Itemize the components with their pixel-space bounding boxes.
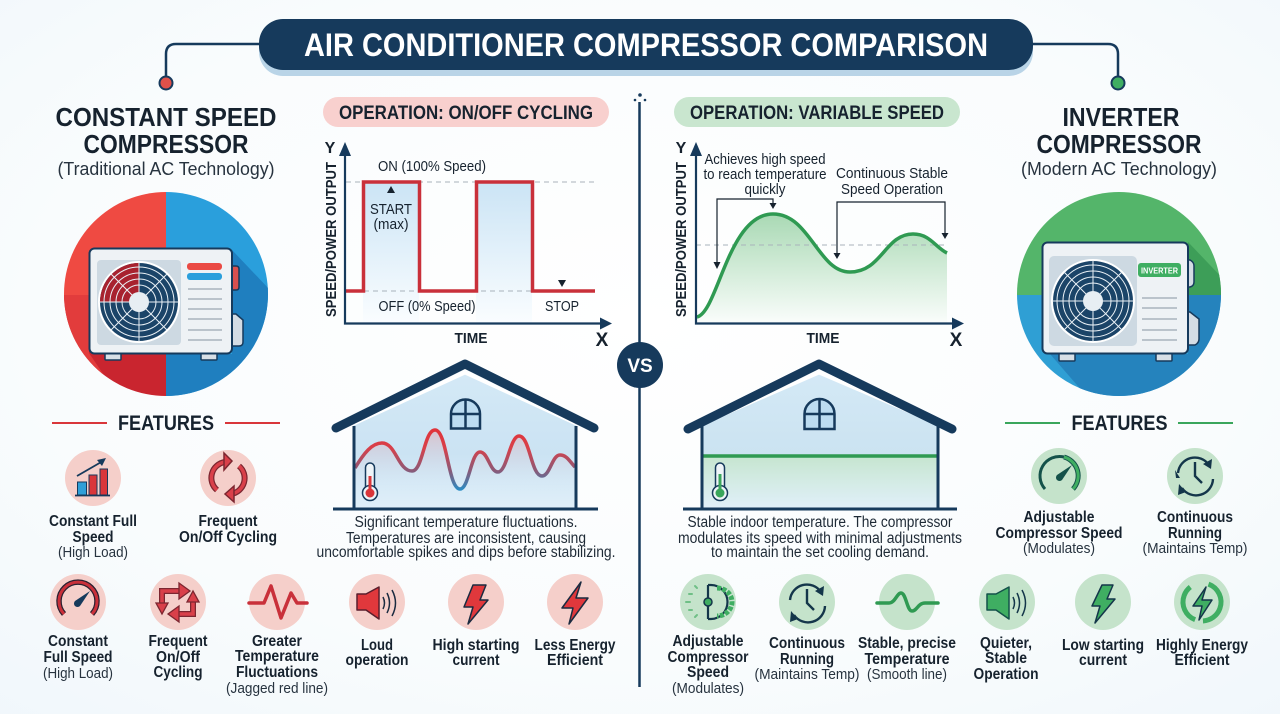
feature: constant full speed (top) bbox=[49, 450, 137, 561]
pill: operation on/off cycling: OPERATION: ON/OFF CYCLING bbox=[339, 103, 593, 124]
left heading: constant speed compressor: (Traditional AC Technology) bbox=[58, 159, 274, 179]
feature: low starting current: current bbox=[1079, 652, 1127, 669]
feature: highly energy efficient: Efficient bbox=[1174, 652, 1230, 669]
pill: operation variable speed bbox=[674, 97, 960, 127]
feature: quieter stable operation: Operation bbox=[974, 666, 1038, 683]
feature: loud operation: operation bbox=[346, 652, 408, 669]
feature: highly energy efficient bbox=[1156, 574, 1248, 669]
right heading: inverter compressor: INVERTER bbox=[1062, 102, 1180, 132]
feature: greater temperature fluctuations: (Jagged red line) bbox=[226, 680, 328, 697]
chart: on/off speed over time: X bbox=[596, 330, 609, 351]
feature: continuous running (top): Running bbox=[1168, 525, 1222, 542]
text: left house description: uncomfortable spikes and dips before stabilizing. bbox=[316, 544, 616, 561]
feature: frequent on/off cycling (top) bbox=[179, 450, 277, 546]
pill: operation variable speed: OPERATION: VARIABLE SPEED bbox=[690, 103, 944, 124]
feature: stable precise temperature: Temperature bbox=[864, 651, 950, 668]
feature: stable precise temperature: Stable, precise bbox=[858, 635, 956, 652]
feature: frequent on/off cycling (bottom) bbox=[148, 574, 208, 681]
pill: operation on/off cycling bbox=[323, 97, 609, 127]
left heading: constant speed compressor: COMPRESSOR bbox=[84, 129, 249, 159]
text: left house description: Temperatures are inconsistent, causing bbox=[346, 530, 586, 547]
feature: low starting current bbox=[1062, 574, 1144, 669]
text: left house description: Significant temperature fluctuations. bbox=[354, 514, 578, 531]
left connector to red node bbox=[160, 44, 259, 90]
chart: on/off speed over time: START bbox=[370, 201, 412, 218]
right heading: inverter compressor bbox=[1021, 102, 1217, 179]
feature: loud operation: Loud bbox=[361, 637, 393, 654]
title banner: AIR CONDITIONER COMPRESSOR COMPARISON bbox=[304, 27, 988, 63]
chart: variable speed over time: Continuous Stable bbox=[836, 165, 948, 182]
feature: continuous running (bottom): Running bbox=[780, 651, 834, 668]
feature: frequent on/off cycling (bottom): Frequent bbox=[148, 633, 208, 650]
VS badge: VS bbox=[627, 356, 653, 377]
title banner bbox=[259, 19, 1033, 76]
feature: high starting current: High starting bbox=[432, 637, 520, 654]
feature: low starting current: Low starting bbox=[1062, 637, 1144, 654]
chart: variable speed over time: TIME bbox=[806, 330, 840, 347]
heading: right features: FEATURES bbox=[1072, 412, 1168, 435]
left heading: constant speed compressor: CONSTANT SPEED bbox=[56, 102, 276, 132]
chart: variable speed over time: SPEED/POWER OUTPUT bbox=[673, 162, 690, 317]
text: right house description: Stable indoor temperature. The compressor bbox=[688, 514, 952, 531]
feature: constant full speed (bottom): Full Speed bbox=[44, 649, 112, 666]
text: left house description bbox=[316, 514, 616, 561]
right connector to green node bbox=[1033, 44, 1124, 90]
feature: frequent on/off cycling (bottom): Cycling bbox=[154, 664, 202, 681]
icon: inverter outdoor unit bbox=[1017, 192, 1230, 400]
feature: constant full speed (top): Constant Full bbox=[49, 513, 137, 530]
feature: quieter stable operation bbox=[974, 574, 1038, 683]
feature: frequent on/off cycling (top): Frequent bbox=[198, 513, 258, 530]
feature: highly energy efficient: Highly Energy bbox=[1156, 637, 1248, 654]
feature: adjustable compressor speed (top): Compressor Speed bbox=[996, 525, 1122, 542]
feature: adjustable compressor speed (bottom): Compressor bbox=[668, 649, 748, 666]
feature: greater temperature fluctuations: Greater bbox=[252, 633, 302, 650]
chart: variable speed over time: Y bbox=[676, 140, 687, 157]
feature: continuous running (top) bbox=[1142, 448, 1248, 557]
feature: greater temperature fluctuations: Fluctuations bbox=[236, 664, 318, 681]
left heading: constant speed compressor bbox=[56, 102, 276, 179]
feature: high starting current: current bbox=[452, 652, 500, 669]
chart: on/off speed over time bbox=[323, 140, 612, 351]
icon: inverter outdoor unit: INVERTER bbox=[1141, 266, 1178, 276]
chart: on/off speed over time: Y bbox=[325, 140, 336, 157]
chart: on/off speed over time: STOP bbox=[545, 298, 579, 315]
feature: adjustable compressor speed (top): (Modulates) bbox=[1023, 540, 1095, 557]
feature: less energy efficient: Less Energy bbox=[534, 637, 616, 654]
feature: constant full speed (bottom): (High Load) bbox=[43, 665, 113, 682]
right heading: inverter compressor: COMPRESSOR bbox=[1036, 129, 1202, 159]
feature: adjustable compressor speed (bottom) bbox=[668, 574, 748, 697]
chart: on/off speed over time: ON (100% Speed) bbox=[378, 158, 486, 175]
feature: stable precise temperature bbox=[858, 574, 956, 683]
feature: constant full speed (top): (High Load) bbox=[58, 544, 128, 561]
feature: adjustable compressor speed (bottom): Speed bbox=[687, 664, 729, 681]
feature: continuous running (top): (Maintains Temp) bbox=[1142, 540, 1248, 557]
feature: less energy efficient bbox=[534, 574, 616, 669]
center divider bbox=[634, 93, 646, 687]
chart: on/off speed over time: (max) bbox=[374, 216, 409, 233]
feature: continuous running (bottom): Continuous bbox=[769, 635, 845, 652]
house with fluctuating temperature bbox=[333, 364, 598, 509]
chart: variable speed over time: Achieves high speed bbox=[704, 151, 826, 168]
chart: variable speed over time: X bbox=[950, 330, 963, 351]
feature: high starting current bbox=[432, 574, 520, 669]
chart: variable speed over time: Speed Operation bbox=[841, 181, 943, 198]
chart: on/off speed over time: SPEED/POWER OUTPUT bbox=[323, 162, 340, 317]
feature: continuous running (bottom): (Maintains Temp) bbox=[754, 666, 860, 683]
feature: adjustable compressor speed (bottom): (Modulates) bbox=[672, 680, 744, 697]
icon: constant speed outdoor unit bbox=[64, 192, 270, 400]
feature: quieter stable operation: Quieter, bbox=[980, 635, 1032, 652]
feature: constant full speed (bottom) bbox=[43, 574, 113, 682]
feature: constant full speed (bottom): Constant bbox=[48, 633, 108, 650]
feature: greater temperature fluctuations: Temperature bbox=[235, 648, 319, 665]
feature: quieter stable operation: Stable bbox=[985, 650, 1027, 667]
feature: adjustable compressor speed (top) bbox=[996, 448, 1122, 557]
feature: continuous running (top): Continuous bbox=[1157, 509, 1233, 526]
feature: adjustable compressor speed (top): Adjustable bbox=[1024, 509, 1095, 526]
chart: on/off speed over time: OFF (0% Speed) bbox=[378, 298, 476, 315]
feature: greater temperature fluctuations bbox=[226, 574, 328, 697]
feature: stable precise temperature: (Smooth line) bbox=[867, 666, 947, 683]
VS badge bbox=[617, 342, 663, 388]
heading: left features: FEATURES bbox=[118, 412, 214, 435]
chart: on/off speed over time: TIME bbox=[454, 330, 488, 347]
chart: variable speed over time: to reach temperature bbox=[704, 166, 826, 183]
feature: loud operation bbox=[346, 574, 408, 669]
chart: variable speed over time: quickly bbox=[744, 181, 786, 198]
feature: adjustable compressor speed (bottom): Adjustable bbox=[672, 633, 744, 650]
feature: frequent on/off cycling (top): On/Off Cycling bbox=[179, 529, 277, 546]
feature: continuous running (bottom) bbox=[754, 574, 860, 683]
text: right house description: modulates its speed with minimal adjustments bbox=[678, 530, 962, 547]
feature: constant full speed (top): Speed bbox=[72, 529, 114, 546]
right heading: inverter compressor: (Modern AC Technology) bbox=[1021, 159, 1217, 179]
feature: less energy efficient: Efficient bbox=[547, 652, 603, 669]
text: right house description bbox=[678, 514, 962, 561]
text: right house description: to maintain the set cooling demand. bbox=[711, 544, 929, 561]
house with stable temperature bbox=[683, 364, 957, 509]
chart: variable speed over time bbox=[673, 140, 964, 351]
feature: frequent on/off cycling (bottom): On/Off bbox=[156, 649, 201, 666]
